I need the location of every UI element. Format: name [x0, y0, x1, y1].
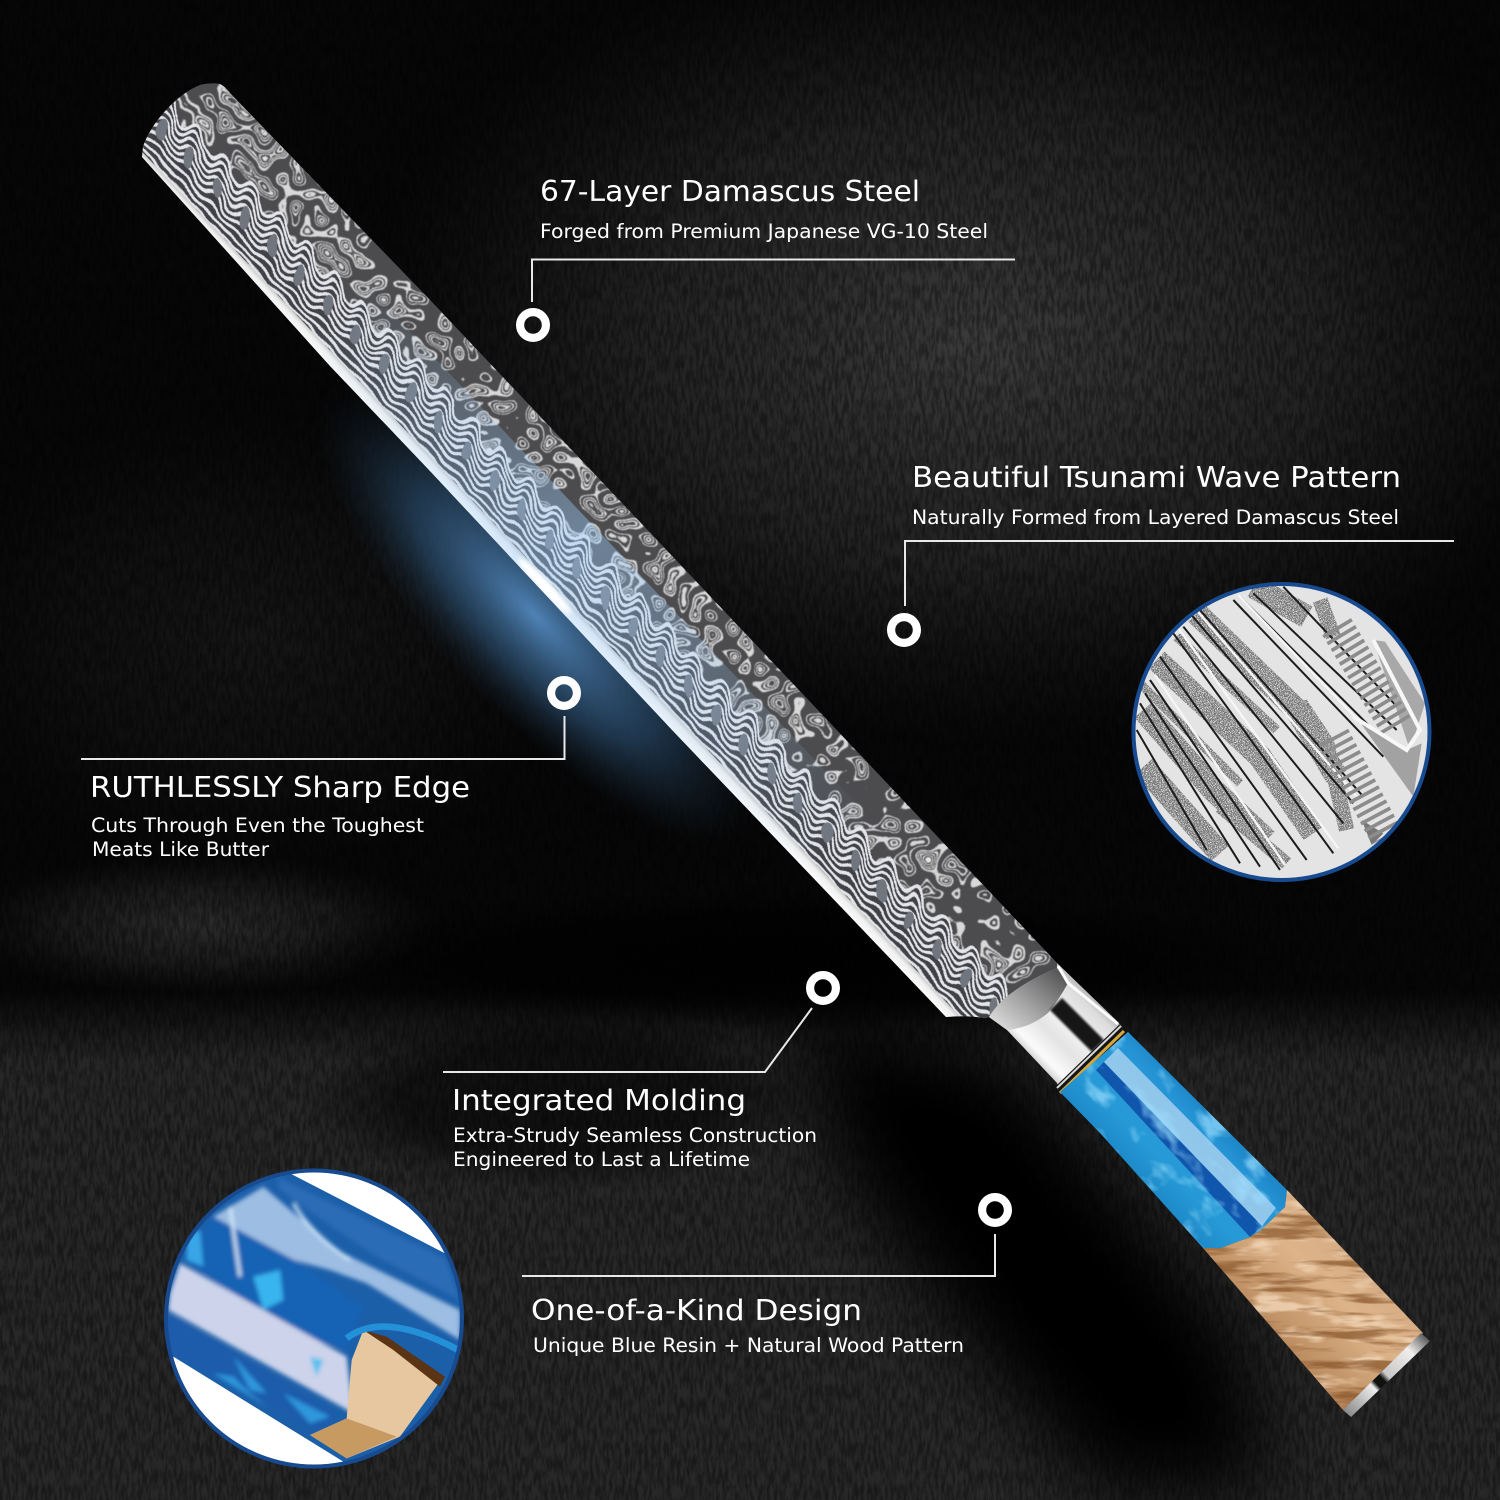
heading: 67-Layer Damascus Steel [540, 175, 920, 208]
leader line [532, 260, 1015, 302]
leader line [443, 1008, 812, 1072]
detail circle: resin and wood close-up [160, 1160, 470, 1480]
marker ring [551, 680, 577, 706]
subheading: Forged from Premium Japanese VG-10 Steel [540, 220, 988, 243]
blue resin handle [1060, 1032, 1287, 1248]
callout: 67-Layer Damascus Steel [520, 175, 1015, 338]
subheading [91, 814, 424, 861]
callout: RUTHLESSLY Sharp Edge [81, 680, 577, 861]
leader line [522, 1234, 995, 1276]
blue edge glow [260, 332, 810, 899]
subheading: Unique Blue Resin + Natural Wood Pattern [533, 1334, 964, 1357]
subheading: Extra-Strudy Seamless Construction [453, 1124, 817, 1147]
marker ring [520, 312, 546, 338]
knife blade with damascus pattern [142, 83, 1057, 1018]
leader line [81, 716, 564, 759]
subheading: Cuts Through Even the Toughest [91, 814, 424, 837]
marker ring [891, 617, 917, 643]
callout: Beautiful Tsunami Wave Pattern [891, 461, 1454, 643]
callout: One-of-a-Kind Design [522, 1197, 1008, 1357]
ferrule and bolster [989, 963, 1123, 1090]
heading: RUTHLESSLY Sharp Edge [90, 771, 470, 804]
subheading: Engineered to Last a Lifetime [453, 1148, 750, 1171]
end cap [1343, 1333, 1430, 1417]
leader line [905, 541, 1454, 606]
heading: One-of-a-Kind Design [531, 1294, 862, 1327]
gold collar rings [1057, 1026, 1124, 1093]
subheading [453, 1124, 817, 1171]
marker ring [810, 975, 836, 1001]
callout: Integrated Molding [443, 975, 836, 1171]
detail circle: damascus close-up [1130, 580, 1435, 885]
subheading: Naturally Formed from Layered Damascus Steel [912, 506, 1399, 529]
heading: Beautiful Tsunami Wave Pattern [912, 461, 1401, 494]
marker ring [982, 1197, 1008, 1223]
heading: Integrated Molding [452, 1084, 746, 1117]
subheading: Meats Like Butter [92, 838, 269, 861]
wood handle [1203, 1190, 1423, 1410]
